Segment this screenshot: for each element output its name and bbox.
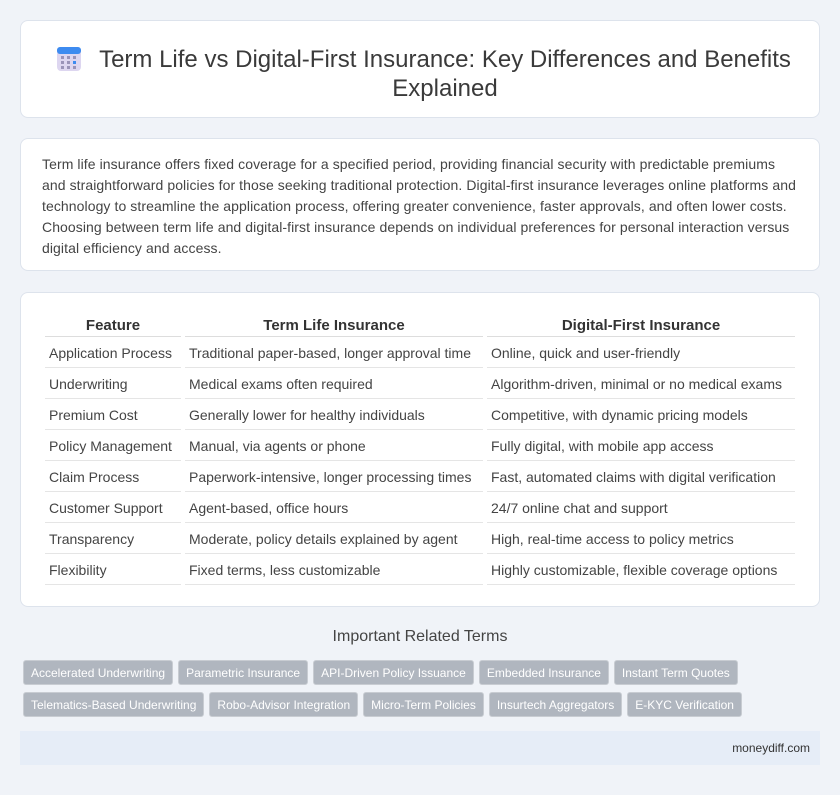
comparison table: Digital-First Insurance [562,317,720,334]
comparison table card [20,292,820,607]
related terms tags: Embedded Insurance [487,666,601,680]
comparison table: Flexibility [49,562,107,578]
related terms tags: Instant Term Quotes [622,666,730,680]
comparison table [45,317,795,585]
related terms tags: E-KYC Verification [635,698,734,712]
comparison table: Underwriting [49,376,128,392]
comparison table: Customer Support [49,500,163,516]
comparison table: Fast, automated claims with digital verification [491,469,776,485]
comparison table: Premium Cost [49,407,138,423]
comparison table: Online, quick and user-friendly [491,345,680,361]
title: Term Life vs Digital-First Insurance: Key Differences and Benefits Explained [99,46,791,102]
related terms tags [23,660,742,717]
icon: calendar [57,47,81,71]
footer [20,731,820,765]
header card [20,20,820,118]
comparison table: Traditional paper-based, longer approval time [189,345,471,361]
related terms tags: Telematics-Based Underwriting [31,698,196,712]
related terms tags: API-Driven Policy Issuance [321,666,466,680]
related terms tags: Robo-Advisor Integration [217,698,350,712]
comparison table: Manual, via agents or phone [189,438,366,454]
comparison table: Highly customizable, flexible coverage options [491,562,777,578]
comparison table: Agent-based, office hours [189,500,348,516]
related terms heading: Important Related Terms [333,628,507,645]
related terms tags: Accelerated Underwriting [31,666,165,680]
comparison table: Paperwork-intensive, longer processing times [189,469,471,485]
related terms tags: Micro-Term Policies [371,698,476,712]
comparison table: Policy Management [49,438,172,454]
comparison table: High, real-time access to policy metrics [491,531,734,547]
comparison table: Generally lower for healthy individuals [189,407,425,423]
related terms tags: Parametric Insurance [186,666,300,680]
comparison table: Application Process [49,345,172,361]
comparison table: Algorithm-driven, minimal or no medical exams [491,376,782,392]
comparison table: Competitive, with dynamic pricing models [491,407,748,423]
comparison table: Feature [86,317,140,334]
comparison table: Transparency [49,531,134,547]
comparison table: Claim Process [49,469,139,485]
comparison table: Fixed terms, less customizable [189,562,380,578]
intro text: Term life insurance offers fixed coverage for a specified period, providing financial security with predictable premiums and straightforward policies for those seeking traditional protection. Digital-first insurance leverages online platforms and technology to streamline the application process, offering greater convenience, faster approvals, and often lower costs. Choosing between term life and digital-first insurance depends on individual preferences for personal interaction versus digital efficiency and access. [42,156,796,256]
related terms tags: Insurtech Aggregators [497,698,614,712]
comparison table: Term Life Insurance [263,317,405,334]
comparison table: Fully digital, with mobile app access [491,438,714,454]
comparison table: Medical exams often required [189,376,373,392]
comparison table: Moderate, policy details explained by agent [189,531,458,547]
footer: moneydiff.com [732,741,810,755]
comparison table: 24/7 online chat and support [491,500,668,516]
